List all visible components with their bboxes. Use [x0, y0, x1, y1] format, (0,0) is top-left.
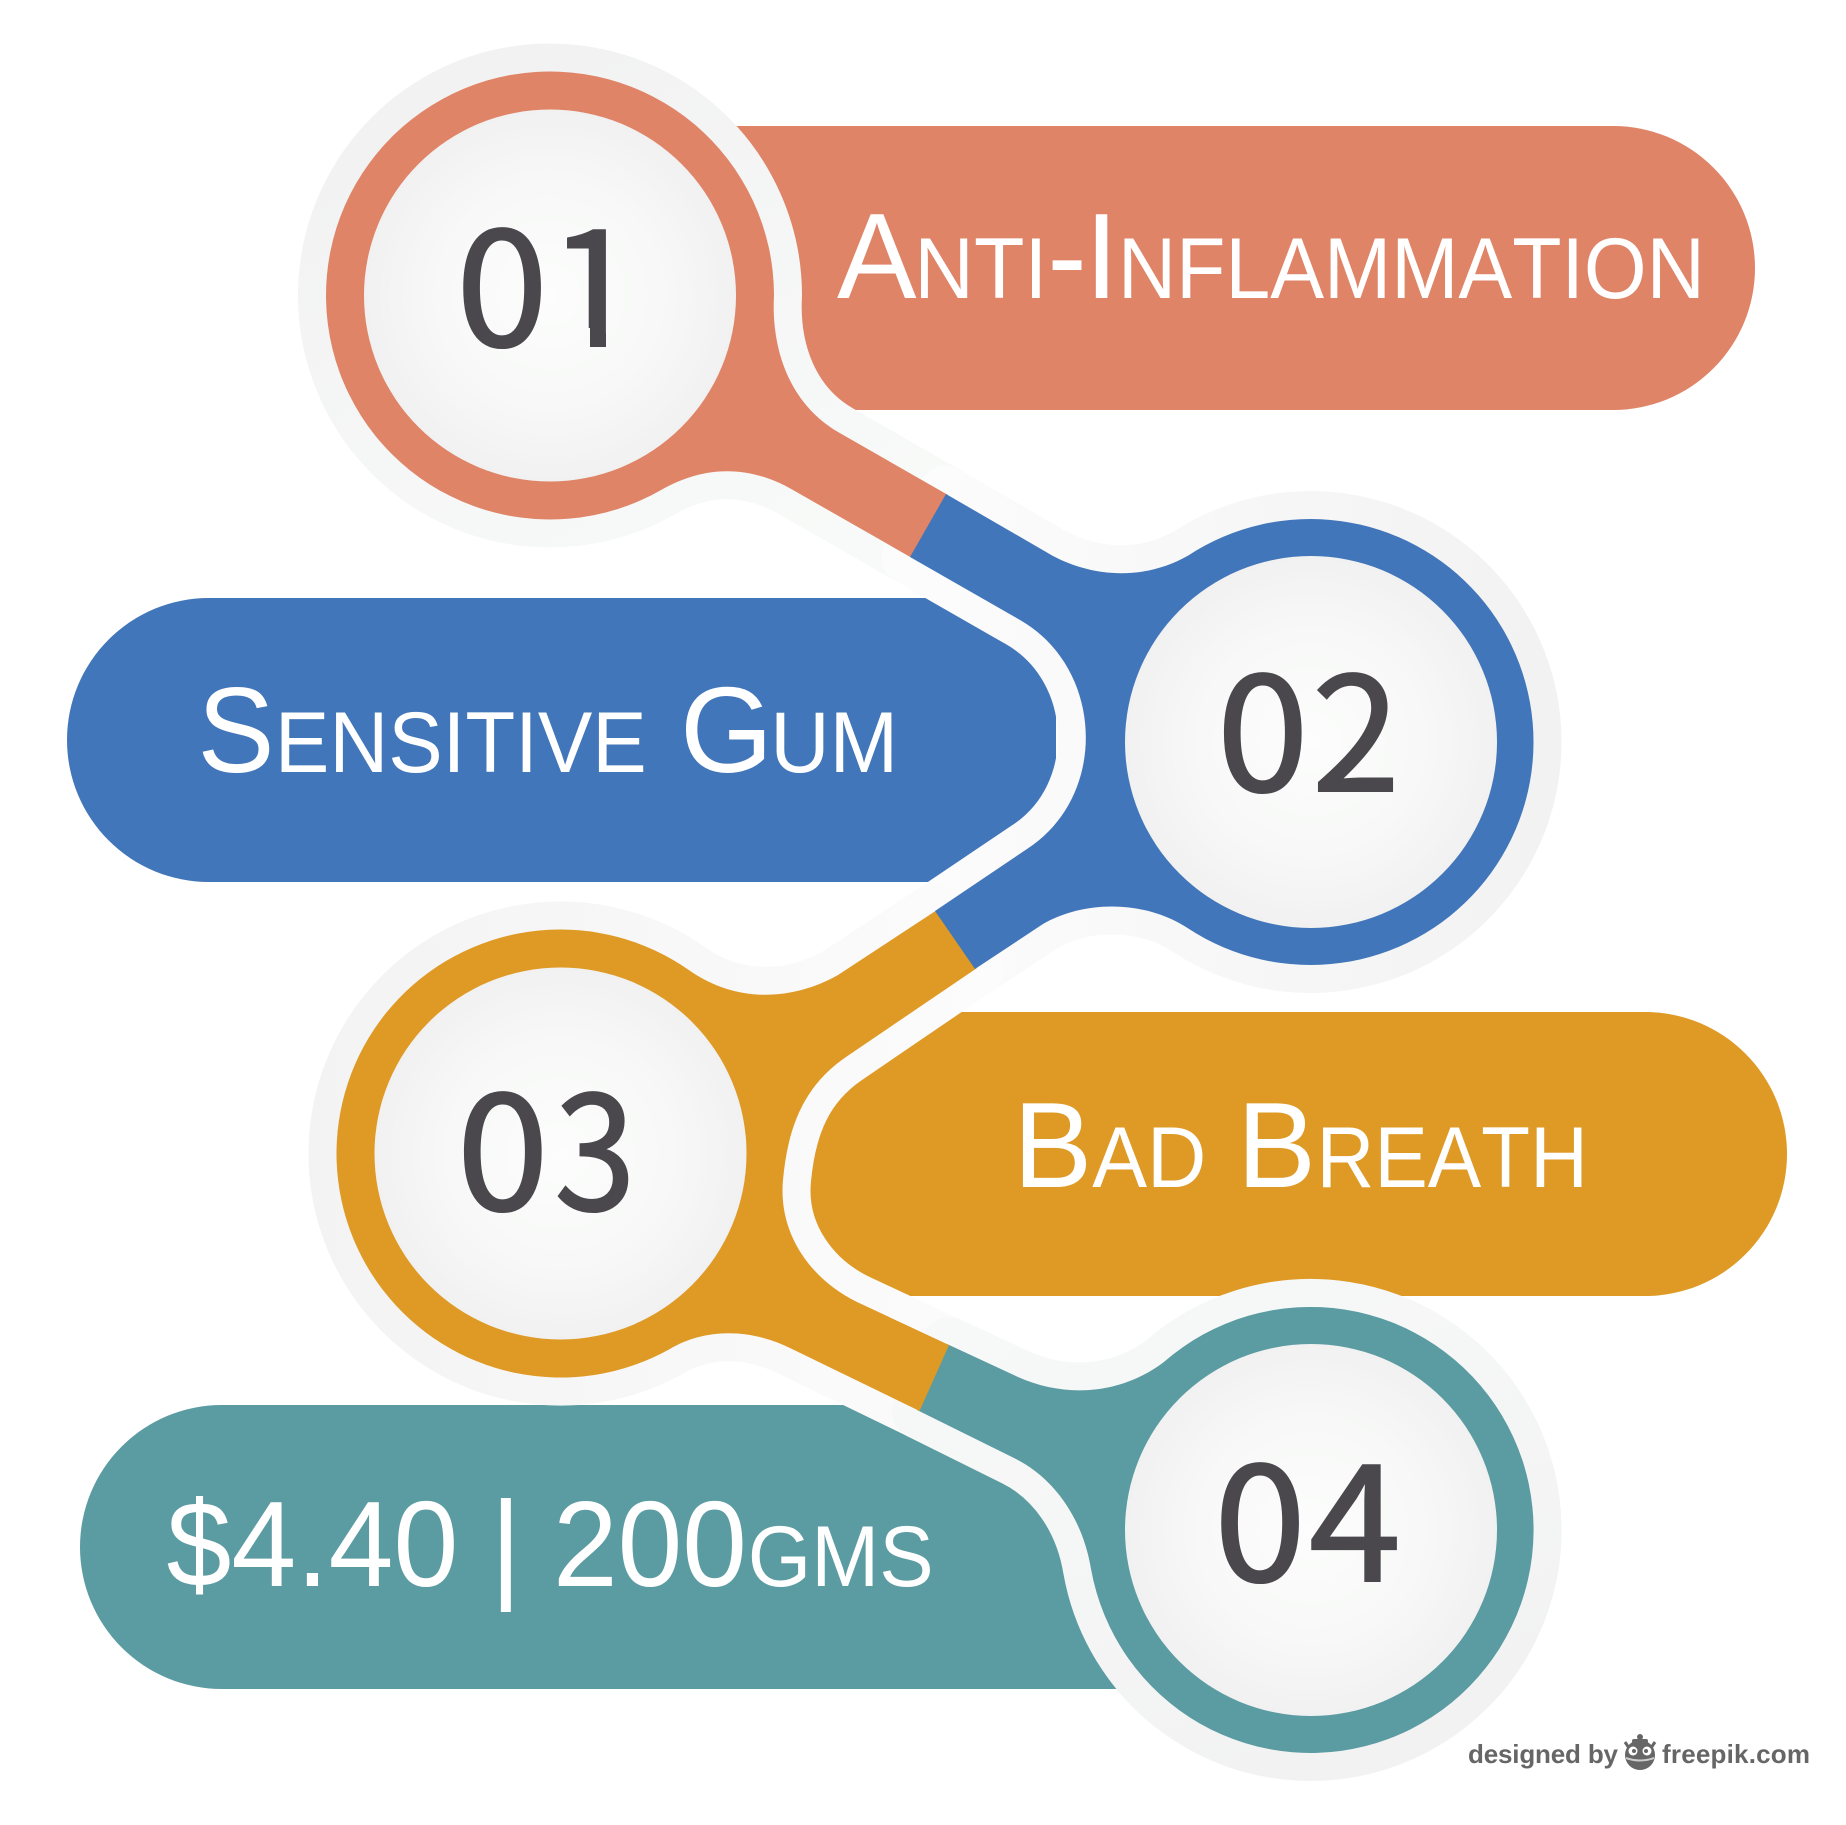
number 02: 0: [1217, 608, 1309, 837]
label: Bad Breath: ad: [1092, 1077, 1206, 1214]
number 01: 1: [548, 163, 640, 392]
label: Anti-Inflammation: nti-: [914, 188, 1087, 325]
number 01: 0: [456, 163, 548, 392]
connector 03 amber: [336, 910, 977, 1411]
label: price and weight: gms: [748, 1476, 934, 1613]
label: Sensitive Gum: G: [680, 662, 773, 798]
bar: Sensitive Gum: [67, 598, 1056, 882]
label: price and weight: $4.40: [166, 1476, 458, 1612]
label: Bad Breath: B: [1013, 1077, 1092, 1213]
label: Anti-Inflammation: I: [1085, 188, 1118, 324]
credit line: [1468, 1734, 1810, 1770]
disc 01: [364, 110, 736, 482]
number 02: 2: [1312, 608, 1400, 837]
label: Anti-Inflammation: A: [837, 188, 917, 324]
disc 03: [374, 968, 746, 1340]
halo 01: [326, 71, 946, 557]
labels: [166, 188, 1705, 1613]
credit: freepik.com: freepik.com: [1662, 1739, 1810, 1769]
halo 03: [336, 911, 975, 1411]
credit: designed by: designed by: [1468, 1739, 1619, 1769]
label: Bad Breath: B: [1237, 1077, 1316, 1213]
label: price and weight: |: [490, 1476, 522, 1612]
connector 02 blue: [910, 494, 1534, 969]
number 04: 0: [1214, 1398, 1306, 1627]
connector 04 teal: [917, 1307, 1534, 1753]
label: Sensitive Gum: ensitive: [275, 662, 647, 799]
halo 02: [910, 494, 1534, 969]
number 03: 0: [457, 1027, 549, 1256]
label: Sensitive Gum: um: [770, 662, 898, 799]
light halos around connectors: [326, 71, 1534, 1753]
bar: Bad Breath: [800, 1012, 1787, 1296]
number 04: 4: [1309, 1398, 1401, 1627]
halo 04: [920, 1307, 1534, 1753]
connector 01 coral: [326, 71, 948, 558]
coloured connectors: [326, 71, 1534, 1753]
bar: price: [80, 1405, 1200, 1689]
label: price and weight: 200: [553, 1476, 747, 1612]
number discs: [364, 110, 1497, 1716]
icon: freepik robot: [1625, 1734, 1655, 1770]
label: Bad Breath: reath: [1316, 1077, 1588, 1214]
bar: Anti-Inflammation: [700, 126, 1755, 410]
label: Anti-Inflammation: nflammation: [1118, 188, 1705, 325]
numbers: [456, 163, 1401, 1627]
label: Sensitive Gum: S: [198, 662, 274, 798]
number 03: 3: [554, 1027, 636, 1256]
disc 04: [1125, 1344, 1497, 1716]
label bars: [67, 126, 1787, 1689]
disc 02: [1125, 556, 1497, 928]
